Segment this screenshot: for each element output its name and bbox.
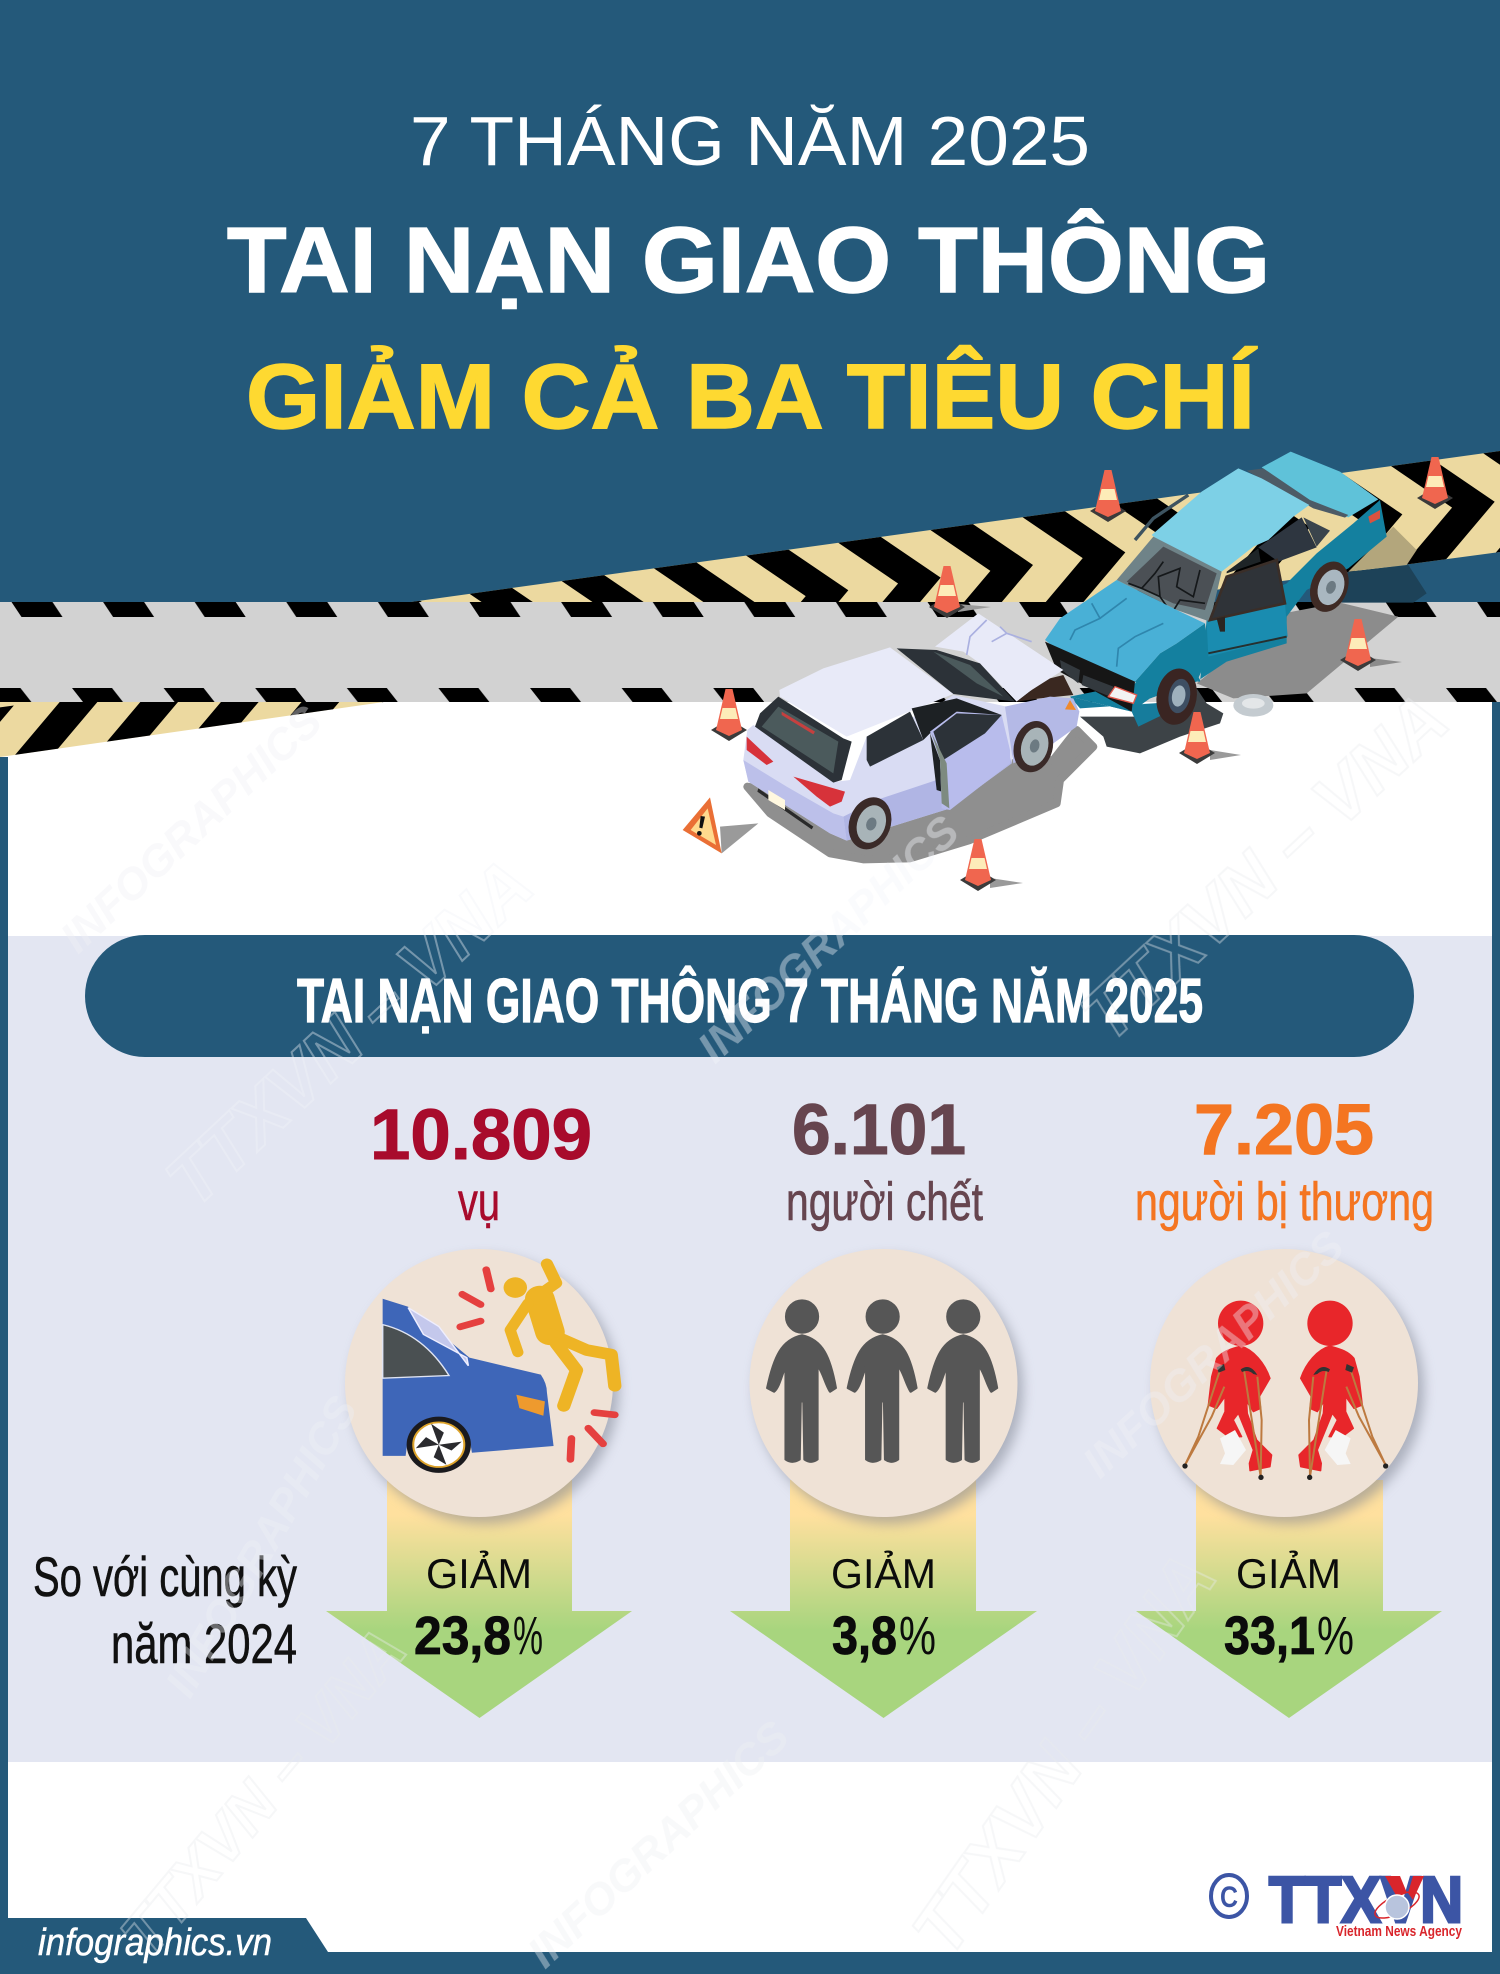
stat 1: số vụ: vụ: [458, 1172, 500, 1232]
logo: TTXVN: TTXVN: [1269, 1863, 1463, 1936]
arrow text 3: GIẢM: [1236, 1549, 1341, 1597]
icon: two red people on crutches: [1182, 1301, 1388, 1480]
circle 2: [750, 1249, 1018, 1517]
watermarks: INFOGRAPHICS: [51, 696, 332, 962]
illustration: blue crashed car: [1045, 452, 1427, 753]
road: [0, 602, 1500, 702]
stat 3: người bị thương: 7.205: [1194, 1091, 1374, 1170]
website tab: [0, 1918, 328, 1974]
arrow 2: [730, 1480, 1037, 1718]
title: 7 tháng năm 2025: 7 THÁNG NĂM 2025: [410, 102, 1090, 180]
stat 1: số vụ: 10.809: [370, 1096, 592, 1175]
icon: car hitting pedestrian: [383, 1264, 615, 1473]
arrow 1: [326, 1480, 632, 1718]
arrow text 2: 3,8: [832, 1606, 897, 1666]
icon: traffic cone 1: [1090, 470, 1126, 522]
arrow text 2: %: [899, 1606, 936, 1666]
stat 1: số vụ: [370, 1096, 592, 1232]
title: giảm cả ba tiêu chí: GIẢM CẢ BA TIÊU CHÍ: [246, 344, 1258, 448]
watermarks: TTXVN – VNA: [108, 1616, 420, 1969]
watermarks: TTXVN – VNA: [898, 1540, 1232, 1969]
page frame: [0, 702, 1500, 1974]
icon: traffic cone 2: [1417, 457, 1453, 509]
icon: traffic cone 4: [1179, 712, 1241, 764]
arrow text 2: GIẢM: [831, 1549, 936, 1597]
stat 2: người chết: [786, 1091, 983, 1232]
icon: three grey people: [767, 1301, 997, 1462]
arrow text 3: [1224, 1549, 1354, 1666]
circle 1: [345, 1249, 613, 1517]
watermarks: TTXVN – VNA: [1066, 679, 1463, 1057]
arrow text 1: 23,8: [414, 1606, 511, 1666]
arrow 3: [1136, 1480, 1442, 1718]
chevron band bottom left: [0, 702, 384, 757]
watermarks: INFOGRAPHICS: [156, 1388, 367, 1705]
watermarks: INFOGRAPHICS: [688, 806, 969, 1072]
chevron band top right: [411, 451, 1500, 602]
arrow text 1: [414, 1549, 543, 1666]
panel: statistics background: [8, 936, 1492, 1762]
circle 1 shadow: [351, 1256, 619, 1524]
logo: TTXVN: C: [1220, 1881, 1238, 1914]
icon: traffic cone 3: [1340, 619, 1402, 671]
watermarks: TTXVN – VNA: [151, 844, 548, 1222]
logo: TTXVN: [1211, 1863, 1463, 1940]
arrow text 1: GIẢM: [426, 1549, 532, 1597]
section heading pill: [85, 935, 1414, 1057]
stat 2: người chết: 6.101: [792, 1091, 966, 1170]
comparison label: năm 2024: [111, 1612, 297, 1675]
arrow text 3: 33,1: [1224, 1606, 1315, 1666]
arrow text 3: %: [1317, 1606, 1354, 1666]
illustration: white crashed car: [743, 613, 1093, 859]
circle 2 shadow: [755, 1256, 1023, 1524]
watermarks: INFOGRAPHICS: [1073, 1221, 1354, 1487]
comparison label: So với cùng kỳ: [33, 1545, 297, 1608]
arrow text 2: [831, 1549, 936, 1666]
comparison label: [33, 1545, 297, 1675]
watermarks: [51, 679, 1463, 1974]
icon: traffic cone 6: [711, 689, 747, 741]
website tab: infographics.vn: [38, 1922, 272, 1964]
title: tai nạn giao thông: TAI NẠN GIAO THÔNG: [227, 208, 1270, 312]
icon: warning triangle: [683, 797, 758, 853]
icon: traffic cone 5: [929, 566, 991, 618]
circle 3: [1150, 1249, 1418, 1517]
logo: TTXVN: Vietnam News Agency: [1336, 1923, 1463, 1940]
watermarks: INFOGRAPHICS: [518, 1711, 799, 1974]
arrow text 1: %: [513, 1606, 543, 1666]
icon: traffic cone 7: [960, 839, 1023, 891]
stat 3: người bị thương: [1135, 1091, 1434, 1232]
stat 2: người chết: người chết: [786, 1172, 983, 1232]
header background: [0, 0, 1500, 603]
circle 3 shadow: [1156, 1256, 1424, 1524]
